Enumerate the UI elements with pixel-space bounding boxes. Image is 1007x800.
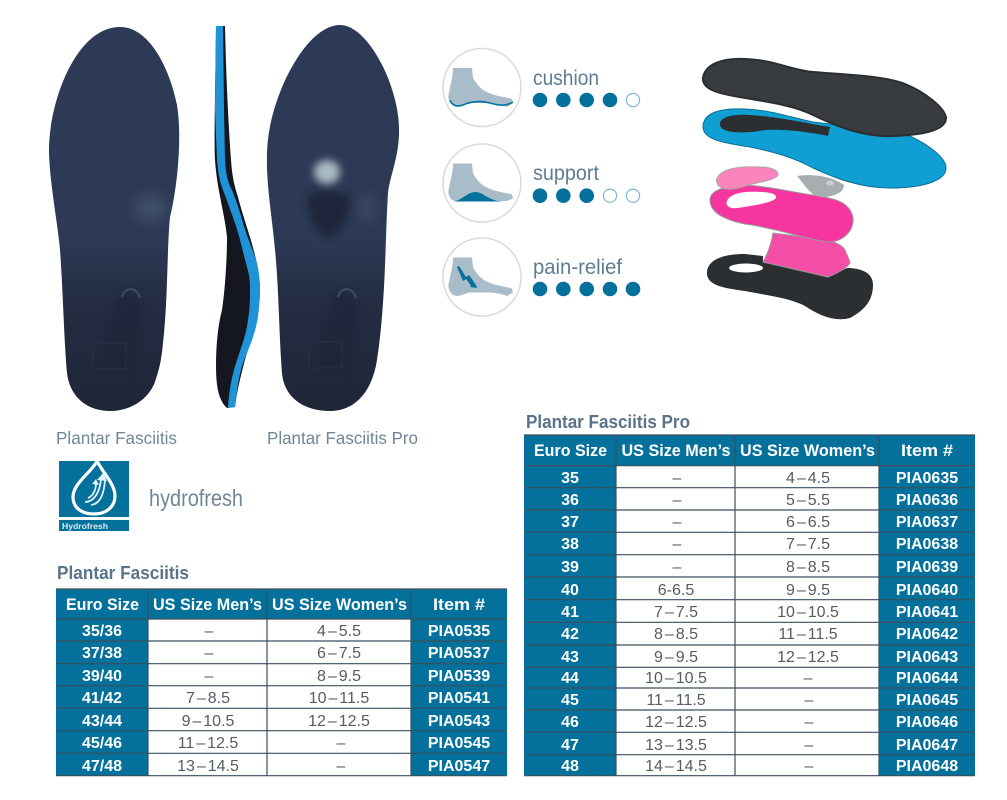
data rows: PIA0647 — [896, 737, 958, 754]
data rows: 6 – 7.5 — [317, 645, 361, 662]
layer: magenta support — [710, 185, 853, 242]
data rows: 8 – 9.5 — [317, 668, 361, 685]
data rows: 45/46 — [82, 735, 122, 752]
data rows: 37/38 — [82, 645, 122, 662]
data rows: – — [673, 514, 682, 531]
data rows: 13 – 14.5 — [177, 758, 239, 775]
heading: Plantar Fasciitis Pro table: Plantar Fasciitis Pro — [526, 412, 690, 432]
data rows: 44 — [561, 670, 579, 687]
label: cushion: cushion — [533, 67, 599, 90]
icon: Hydrofresh logo — [59, 461, 129, 531]
data rows: – — [205, 623, 214, 640]
header row — [534, 441, 954, 460]
data rows: 38 — [561, 536, 579, 553]
data rows: – — [805, 692, 814, 709]
data rows: PIA0638 — [896, 536, 958, 553]
data rows: 9 – 10.5 — [182, 713, 235, 730]
table: Plantar Fasciitis Pro sizes — [524, 435, 975, 776]
label: pain-relief: pain-relief — [533, 256, 622, 279]
header row: Euro Size — [66, 595, 139, 614]
data rows: – — [804, 670, 813, 687]
data rows: – — [337, 758, 346, 775]
data rows — [82, 623, 490, 775]
data rows: 45 — [561, 692, 579, 709]
data rows: 8 – 8.5 — [654, 626, 698, 643]
data rows: 47 — [561, 737, 579, 754]
header row: US Size Men’s — [153, 595, 262, 614]
rating dots: 4 of 5 — [533, 93, 640, 107]
header row: US Size Men’s — [622, 441, 730, 460]
exploded view of insole layers — [703, 59, 946, 319]
data rows: 37 — [561, 514, 579, 531]
data rows: 9 – 9.5 — [786, 582, 830, 599]
data rows: 10 – 10.5 — [777, 604, 839, 621]
data rows: PIA0642 — [896, 626, 958, 643]
layer: lower pink pad — [763, 233, 850, 277]
data rows: 7 – 7.5 — [786, 536, 830, 553]
data rows: 43/44 — [82, 713, 122, 730]
data rows: PIA0646 — [896, 714, 958, 731]
data rows: 7 – 7.5 — [654, 604, 698, 621]
data rows: 6 – 6.5 — [786, 514, 830, 531]
insole: Plantar Fasciitis top view — [49, 27, 179, 411]
data rows: – — [805, 758, 814, 775]
data rows: – — [805, 737, 814, 754]
data rows: PIA0637 — [896, 514, 958, 531]
header row: Item # — [433, 595, 486, 614]
layer: small pink heel pad — [716, 167, 778, 189]
label: hydrofresh: hydrofresh — [149, 485, 243, 511]
data rows: 8 – 8.5 — [786, 559, 830, 576]
data rows: PIA0545 — [428, 735, 490, 752]
table: Plantar Fasciitis sizes — [56, 589, 507, 776]
data rows: 11 – 11.5 — [778, 626, 838, 643]
data rows: – — [673, 536, 682, 553]
data rows: 42 — [561, 626, 579, 643]
data rows: PIA0535 — [428, 623, 490, 640]
data rows: 6-6.5 — [658, 582, 694, 599]
data rows: 35 — [561, 470, 579, 487]
header row — [66, 595, 486, 614]
data rows: 12 – 12.5 — [777, 649, 839, 666]
data rows: 10 – 10.5 — [645, 670, 707, 687]
data rows: 11 – 11.5 — [646, 692, 706, 709]
caption: Plantar Fasciitis: Plantar Fasciitis — [56, 428, 177, 448]
data rows: – — [805, 714, 814, 731]
data rows: PIA0541 — [428, 690, 490, 707]
data rows: 5 – 5.5 — [786, 492, 830, 509]
data rows: PIA0643 — [896, 649, 958, 666]
icon: foot with arch support — [443, 144, 521, 222]
data rows: 4 – 5.5 — [317, 623, 361, 640]
feature: cushion rating — [443, 48, 640, 126]
header row: US Size Women’s — [740, 441, 875, 460]
data rows: 47/48 — [82, 758, 122, 775]
header row: Euro Size — [534, 441, 607, 460]
data rows: 14 – 14.5 — [645, 758, 707, 775]
data rows: 39 — [561, 559, 579, 576]
data rows: – — [673, 492, 682, 509]
layer: dark top cover — [703, 59, 946, 136]
data rows: 7 – 8.5 — [186, 690, 230, 707]
data rows: 39/40 — [82, 668, 122, 685]
data rows: 36 — [561, 492, 579, 509]
rating dots: 3 of 5 — [533, 188, 640, 203]
data rows: 35/36 — [82, 623, 122, 640]
data rows: PIA0547 — [428, 758, 490, 775]
layer: dark lower shell — [707, 254, 873, 319]
icon: foot with pain bolt — [443, 238, 521, 316]
data rows: PIA0543 — [428, 713, 490, 730]
header row: Item # — [901, 441, 954, 460]
data rows: 40 — [561, 582, 579, 599]
data rows: PIA0640 — [896, 582, 958, 599]
data rows: PIA0635 — [896, 470, 958, 487]
data rows: PIA0645 — [896, 692, 958, 709]
rating dots: 5 of 5 — [533, 282, 640, 296]
data rows: 41/42 — [82, 690, 122, 707]
label: support: support — [533, 162, 599, 185]
data rows: – — [673, 470, 682, 487]
layer: blue foam — [703, 109, 946, 188]
data rows: PIA0636 — [896, 492, 958, 509]
data rows: – — [673, 559, 682, 576]
insole: side profile — [215, 26, 260, 408]
insole: Plantar Fasciitis Pro top view — [267, 25, 399, 411]
data rows: PIA0641 — [896, 604, 958, 621]
feature: support rating — [443, 144, 640, 222]
data rows: 11 – 12.5 — [178, 735, 238, 752]
data rows: – — [205, 668, 214, 685]
feature: pain-relief rating — [443, 238, 640, 316]
data rows: 13 – 13.5 — [645, 737, 707, 754]
data rows: 46 — [561, 714, 579, 731]
data rows: PIA0648 — [896, 758, 958, 775]
data rows: 48 — [561, 758, 579, 775]
data rows: PIA0537 — [428, 645, 490, 662]
caption: Plantar Fasciitis Pro: Plantar Fasciitis Pro — [267, 428, 418, 448]
data rows: 43 — [561, 649, 579, 666]
data rows: PIA0539 — [428, 668, 490, 685]
data rows: – — [337, 735, 346, 752]
data rows: 12 – 12.5 — [645, 714, 707, 731]
data rows: PIA0639 — [896, 559, 958, 576]
header row: US Size Women’s — [272, 595, 407, 614]
data rows: – — [205, 645, 214, 662]
data rows: 9 – 9.5 — [654, 649, 698, 666]
icon: Hydrofresh logo: Hydrofresh — [62, 521, 108, 531]
data rows: 41 — [561, 604, 579, 621]
data rows: 10 – 11.5 — [309, 690, 369, 707]
layer: grey metatarsal pad — [797, 175, 844, 197]
icon: foot with cushion — [443, 48, 521, 126]
data rows — [561, 470, 958, 775]
heading: Plantar Fasciitis table: Plantar Fasciitis — [57, 563, 189, 583]
data rows: PIA0644 — [896, 670, 958, 687]
data rows: 4 – 4.5 — [786, 470, 830, 487]
data rows: 12 – 12.5 — [308, 713, 370, 730]
